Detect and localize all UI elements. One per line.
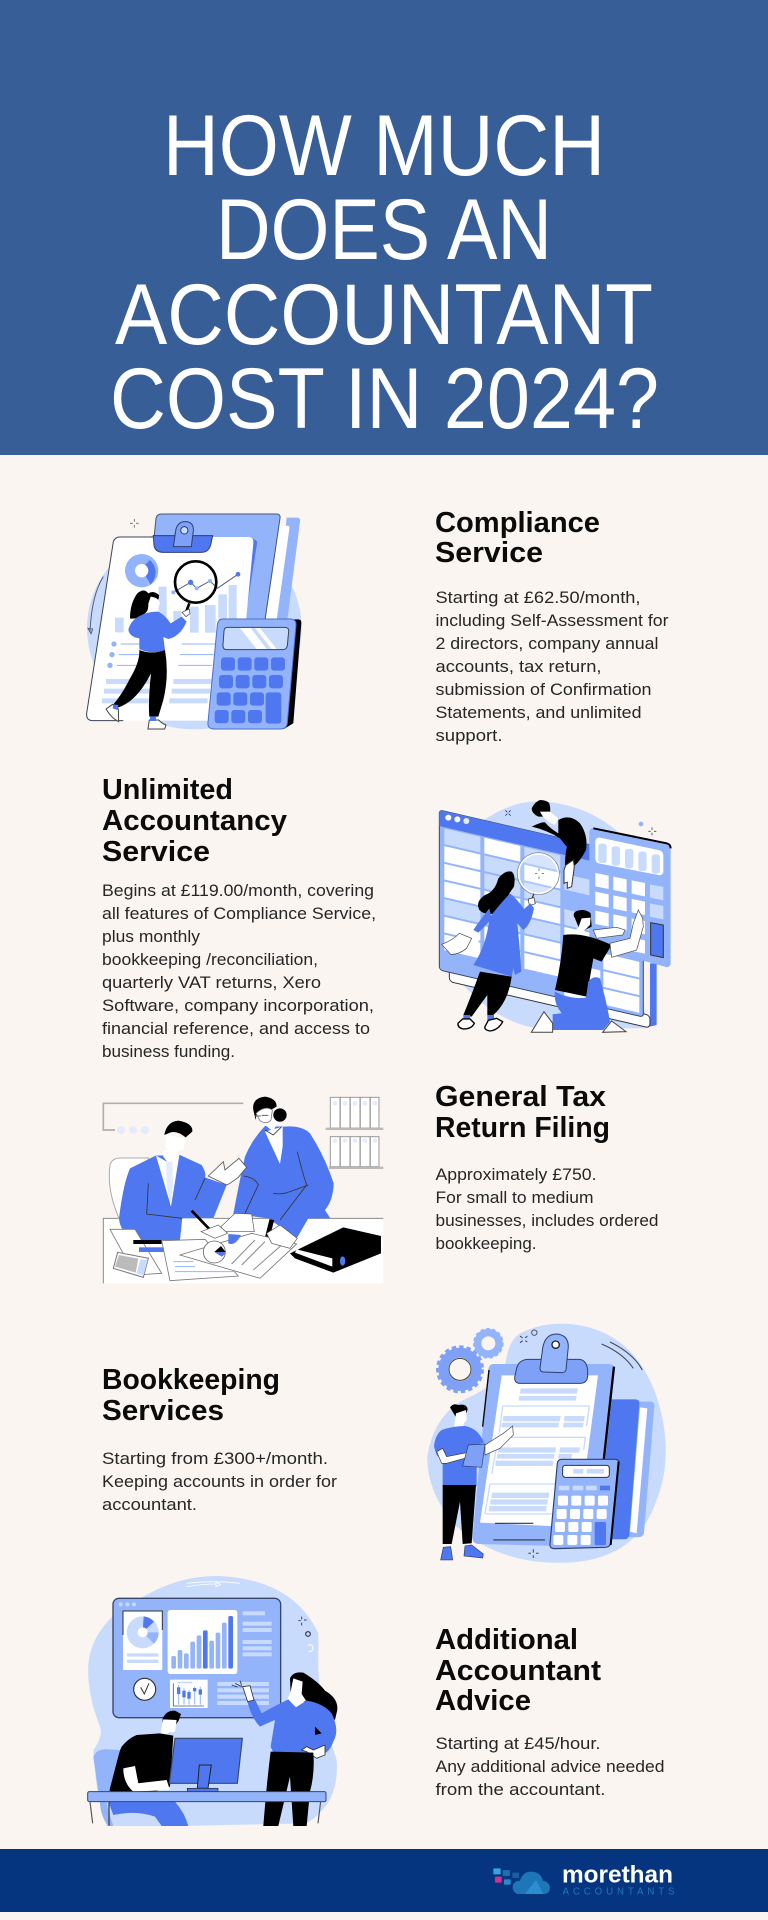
text: general tax details: [436, 1165, 658, 1253]
text: unlimited accountancy details: all features of Compliance Service,: [102, 904, 376, 923]
calculator: [113, 1252, 148, 1277]
heading: bookkeeping services: [102, 1364, 280, 1427]
text: unlimited accountancy details: financial reference, and access to: [102, 1019, 370, 1038]
text: compliance service details: Statements, and unlimited: [436, 703, 642, 722]
text: bookkeeping details: [102, 1449, 337, 1514]
magnifier: [175, 561, 216, 603]
heading: compliance service: Compliance: [435, 507, 600, 539]
footer band: [0, 1849, 768, 1912]
text: compliance service details: including Self-Assessment for: [436, 611, 669, 630]
folder: [610, 1402, 654, 1537]
sparkle: [130, 519, 139, 528]
heading: bookkeeping services: Services: [102, 1395, 224, 1427]
heading: compliance service: [435, 507, 600, 569]
board: [473, 1364, 615, 1547]
candle chart: [170, 1680, 208, 1708]
illustration: team with spreadsheet: [439, 800, 671, 1032]
illustration: woman with clipboard and calculator: [87, 514, 302, 729]
heading: unlimited accountancy service: Unlimited: [102, 774, 233, 806]
decorations: [298, 1617, 307, 1625]
form rows: [489, 1388, 585, 1511]
magnifier: [518, 854, 558, 894]
header band: [0, 0, 768, 455]
text: compliance service details: [436, 588, 669, 745]
text: bookkeeping details: accountant.: [102, 1495, 197, 1514]
title: ACCOUNTANT: [115, 267, 653, 363]
clip: [153, 536, 213, 552]
woman: [478, 871, 515, 914]
heading: additional accountant advice: Additional: [435, 1624, 578, 1656]
text: additional advice details: from the accountant.: [436, 1780, 606, 1799]
title: COST IN 2024?: [110, 351, 659, 447]
text: general tax details: businesses, includes ordered: [436, 1211, 658, 1230]
logo: morethan accountants: [493, 1862, 675, 1897]
binders: [330, 1097, 379, 1167]
text: compliance service details: accounts, tax return,: [436, 657, 602, 676]
heading: unlimited accountancy service: Service: [102, 836, 210, 868]
papers: [110, 1229, 162, 1275]
pie panel: [123, 1611, 162, 1670]
legs: [108, 1802, 188, 1826]
text: bookkeeping details: Starting from £300+/month.: [102, 1449, 328, 1468]
pens: [192, 1211, 217, 1237]
gears: [443, 1353, 477, 1386]
sparkles: [505, 810, 656, 835]
text: unlimited accountancy details: Software, company incorporation,: [102, 996, 374, 1015]
man on top: [532, 800, 550, 817]
kneeling man: [574, 910, 592, 930]
illustration: two colleagues at a desk: [103, 1097, 383, 1283]
text: compliance service details: submission of Confirmation: [436, 680, 652, 699]
logo: morethan accountants: ACCOUNTANTS: [562, 1886, 675, 1897]
woman: [130, 590, 159, 619]
text: general tax details: bookkeeping.: [436, 1234, 536, 1253]
illustration: dashboard presentation: [88, 1576, 337, 1826]
text: unlimited accountancy details: plus monthly: [102, 927, 201, 946]
check: [134, 1678, 156, 1700]
calculator: [550, 1459, 619, 1549]
heading: additional accountant advice: [435, 1624, 601, 1717]
heading: unlimited accountancy service: [102, 774, 287, 868]
bar chart: [115, 585, 237, 633]
clip: [515, 1359, 588, 1383]
screen: [113, 1598, 281, 1718]
woman: [233, 1126, 334, 1238]
text: general tax details: For small to medium: [436, 1188, 594, 1207]
desk: [88, 1792, 326, 1802]
title: [110, 98, 659, 447]
heading: bookkeeping services: Bookkeeping: [102, 1364, 280, 1396]
man: [119, 1155, 227, 1240]
text: general tax details: Approximately £750.: [436, 1165, 596, 1184]
heading: additional accountant advice: Advice: [435, 1685, 531, 1717]
text: additional advice details: Starting at £45/hour.: [436, 1734, 600, 1753]
text: compliance service details: support.: [436, 726, 502, 745]
title: DOES AN: [216, 182, 552, 278]
binder: [290, 1227, 381, 1273]
title: HOW MUCH: [163, 98, 605, 194]
heading: additional accountant advice: Accountant: [435, 1655, 601, 1687]
logo: morethan accountants: morethan: [562, 1862, 673, 1888]
woman: [290, 1672, 337, 1720]
calculator: [284, 619, 301, 729]
chair: [109, 1158, 148, 1218]
text: unlimited accountancy details: Begins at £119.00/month, covering: [102, 881, 374, 900]
text: unlimited accountancy details: quarterly VAT returns, Xero: [102, 973, 321, 992]
bar panel: [168, 1610, 237, 1674]
text: unlimited accountancy details: bookkeeping /reconciliation,: [102, 950, 318, 969]
text: additional advice details: [436, 1734, 664, 1799]
heading: compliance service: Service: [435, 537, 543, 569]
text: additional advice details: Any additional advice needed: [436, 1757, 664, 1776]
monitor: [169, 1738, 242, 1783]
donut: [125, 554, 158, 587]
heading: general tax return filing: General Tax: [435, 1081, 606, 1113]
illustration: man with clipboard form and calculator: [427, 1324, 666, 1563]
heading: unlimited accountancy service: Accountancy: [102, 805, 287, 837]
heading: general tax return filing: [435, 1081, 610, 1144]
hands: [208, 1158, 247, 1185]
heading: general tax return filing: Return Filing: [435, 1112, 610, 1144]
right panel: [589, 828, 671, 967]
man: [163, 1711, 181, 1733]
text: compliance service details: Starting at £62.50/month,: [436, 588, 640, 607]
text: unlimited accountancy details: [102, 881, 376, 1061]
desk: [103, 1218, 383, 1283]
list lines: [107, 641, 117, 668]
text: unlimited accountancy details: business funding.: [102, 1042, 235, 1061]
text: bookkeeping details: Keeping accounts in order for: [102, 1472, 337, 1491]
text: compliance service details: 2 directors, company annual: [436, 634, 658, 653]
man: [450, 1404, 468, 1417]
hand on paper: [267, 1225, 297, 1248]
